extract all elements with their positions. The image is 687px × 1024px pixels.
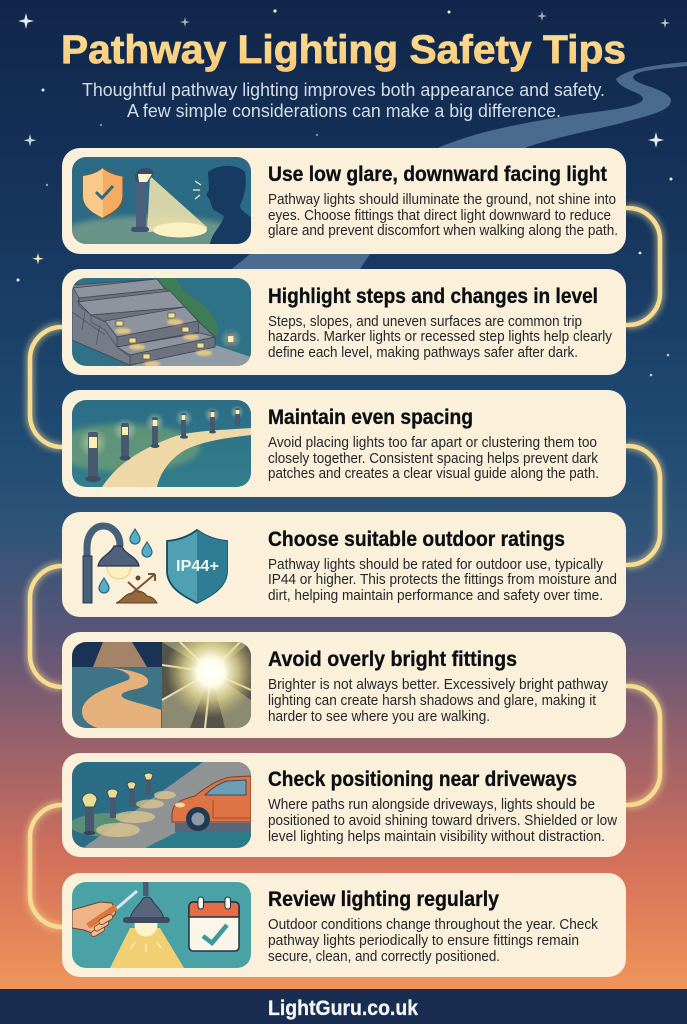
body text: positioned to avoid shining toward drivers. Shielded or low xyxy=(268,813,618,829)
heading: Avoid overly bright fittings xyxy=(268,648,517,671)
subtitle xyxy=(82,79,605,121)
illustration: car beside bollards xyxy=(70,762,251,848)
panel: low glare xyxy=(60,148,626,254)
body text: harder to see where you are walking. xyxy=(268,709,490,725)
footer text: LightGuru.co.uk xyxy=(268,997,418,1020)
icon: lamp with rain and dirt xyxy=(83,526,157,603)
illustration: lit steps xyxy=(72,278,251,367)
panel: outdoor ratings xyxy=(62,512,626,617)
body text xyxy=(268,677,609,725)
icon: IP44+ shield: IP44+ xyxy=(176,558,219,575)
body text: lighting can create harsh shadows and glare, making it xyxy=(268,693,596,709)
heading: Choose suitable outdoor ratings xyxy=(268,528,565,551)
body text: Where paths run alongside driveways, lights should be xyxy=(268,797,595,813)
heading: Check positioning near driveways xyxy=(268,768,577,791)
panel: overly bright xyxy=(62,626,626,738)
body text: dirt, helping maintain performance and safety over time. xyxy=(268,588,603,604)
background winding path xyxy=(232,62,687,269)
heading: Highlight steps and changes in level xyxy=(268,285,598,308)
body text xyxy=(268,314,613,361)
body text: Avoid placing lights too far apart or clustering them too xyxy=(268,435,597,451)
panel: review xyxy=(62,873,626,977)
body text: closely together. Consistent spacing helps prevent dark xyxy=(268,451,599,467)
stars xyxy=(16,9,672,376)
body text xyxy=(268,435,599,482)
body text xyxy=(268,797,618,845)
illustration: soft path versus glare xyxy=(72,642,251,728)
subtitle: A few simple considerations can make a big difference. xyxy=(127,100,561,121)
illustration: lamp, shield and person xyxy=(72,157,251,244)
footer bar xyxy=(0,989,687,1024)
body text: secure, clean, and correctly positioned. xyxy=(268,949,500,965)
icon: IP44+ shield xyxy=(167,530,227,603)
body text: pathway lights periodically to ensure fittings remain xyxy=(268,933,579,949)
body text: Pathway lights should illuminate the ground, not shine into xyxy=(268,192,616,208)
subtitle: Thoughtful pathway lighting improves both appearance and safety. xyxy=(82,79,605,100)
heading: Use low glare, downward facing light xyxy=(268,163,607,186)
panel: driveways xyxy=(62,753,626,857)
illustration: hand, lamp and calendar xyxy=(72,882,251,968)
body text: patches and creates a clear visual guide along the path. xyxy=(268,466,599,482)
body text xyxy=(268,917,599,965)
body text: glare and prevent discomfort when walking along the path. xyxy=(268,223,618,239)
body text: define each level, making pathways safer after dark. xyxy=(268,345,578,361)
body text: hazards. Marker lights or recessed step lights help clearly xyxy=(268,329,613,345)
body text: Steps, slopes, and uneven surfaces are common trip xyxy=(268,314,582,330)
body text xyxy=(268,557,617,604)
body text: level lighting helps maintain visibility without distraction. xyxy=(268,829,605,845)
heading: Review lighting regularly xyxy=(268,888,499,911)
illustration: row of bollards xyxy=(72,400,251,487)
body text: IP44 or higher. This protects the fittings from moisture and xyxy=(268,572,617,588)
body text: Outdoor conditions change throughout the year. Check xyxy=(268,917,599,933)
heading: Maintain even spacing xyxy=(268,406,473,429)
glowing connectors xyxy=(30,208,660,927)
body text: eyes. Choose fittings that direct light downward to reduce xyxy=(268,208,611,224)
body text: Brighter is not always better. Excessively bright pathway xyxy=(268,677,609,693)
body text: Pathway lights should be rated for outdoor use, typically xyxy=(268,557,604,573)
panel: spacing xyxy=(50,390,626,497)
body text xyxy=(268,192,618,239)
panel: steps xyxy=(62,269,626,375)
title: Pathway Lighting Safety Tips xyxy=(61,28,626,72)
